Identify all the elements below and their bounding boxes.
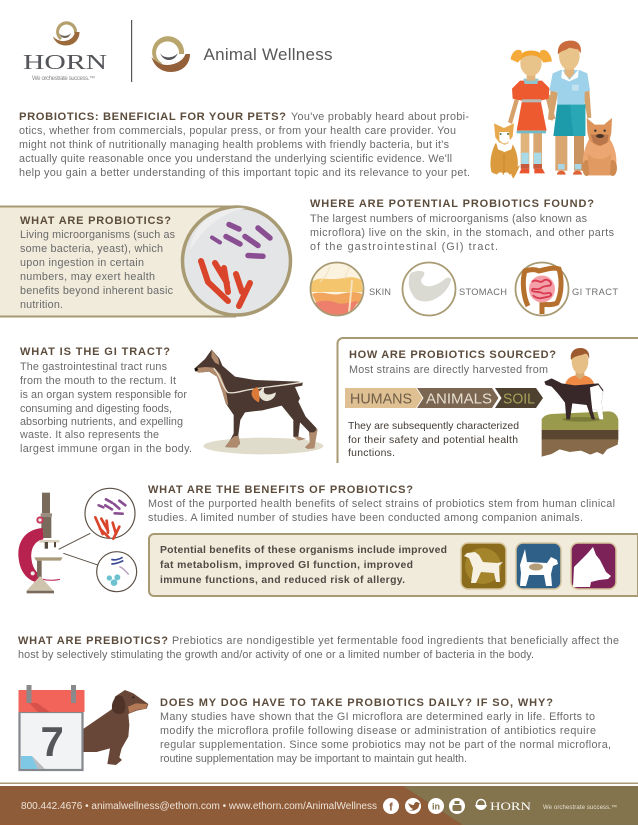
intro paragraph: otics, whether from commercials, popular press, or from your health care provider. You: [19, 125, 456, 137]
text block: daily probiotics: routine supplementation may be important to maintain gut health.: [160, 753, 467, 765]
panel: how are probiotics sourced: [338, 338, 638, 463]
text block: daily probiotics: Many studies have shown that the GI microflora are determined early in life. Efforts to: [160, 711, 595, 723]
footer logo: [475, 799, 531, 813]
text block: daily probiotics: [160, 697, 611, 765]
chevron: soil: [495, 388, 543, 408]
family with pets illustration: [490, 41, 617, 179]
panel: what is the gi tract: [19, 346, 192, 455]
icon: blue dog badge: [516, 543, 561, 589]
text block: daily probiotics: regular supplementation. Since some probiotics may not be part of the normal microflora,: [160, 739, 611, 751]
icon: magnified microbes: [97, 552, 137, 592]
tagline: We orchestrate success.™: [543, 804, 617, 811]
description: [20, 229, 176, 311]
chevron: animals: [417, 388, 498, 408]
heading: WHAT ARE THE BENEFITS OF PROBIOTICS?: [148, 484, 413, 496]
icon: magnified bacteria: [85, 488, 135, 539]
heading: HOW ARE PROBIOTICS SOURCED?: [349, 349, 556, 361]
intro paragraph: PROBIOTICS: BENEFICIAL FOR YOUR PETS?: [19, 111, 286, 123]
heading: WHAT IS THE GI TRACT?: [20, 346, 170, 358]
description: some bacteria, yeast), which: [20, 243, 163, 255]
icon: skin: [310, 262, 364, 316]
panel: benefits of probiotics: [148, 484, 638, 596]
callout: potential benefits: immune functions, and reduced risk of allergy.: [160, 575, 405, 586]
illustration: dachshund: [82, 690, 148, 765]
description: of the gastrointestinal (GI) tract.: [310, 241, 498, 253]
footer band: [0, 782, 638, 825]
heading: WHAT ARE PROBIOTICS?: [20, 215, 171, 227]
text block: what are prebiotics: Prebiotics are nondigestible yet fermentable food ingredients that beneficially affect the: [172, 635, 619, 647]
description: upon ingestion in certain: [20, 257, 144, 269]
icon: bacteria circle: [182, 207, 290, 315]
note: functions.: [348, 448, 395, 459]
icon: linkedin: in: [432, 802, 440, 812]
text block: what are prebiotics: host by selectively stimulating the growth and/or activity of one or a limited number of bacteria in the body.: [18, 649, 534, 661]
callout: potential benefits: [149, 534, 638, 596]
description: Living microorganisms (such as: [20, 229, 176, 241]
description: [310, 213, 615, 253]
Horn logo: HORN: [23, 50, 108, 74]
description: waste. It also represents the: [19, 429, 159, 441]
intro paragraph: You've probably heard about probi-: [291, 111, 469, 123]
chevron: animals: ANIMALS: [426, 392, 492, 408]
intro paragraph: [19, 111, 470, 179]
panel: where are probiotics found: [310, 198, 618, 316]
label: STOMACH: [459, 287, 507, 297]
Horn logo: We orchestrate success.™: [32, 75, 95, 82]
intro paragraph: actually quite reasonable once you understand the underlying scientific evidence. We'll: [19, 153, 452, 165]
icon: twitter: [405, 798, 421, 814]
icon: boy: [548, 41, 591, 175]
illustration: person, cow and soil: [542, 348, 618, 457]
label: GI TRACT: [572, 287, 618, 297]
description: is an organ system responsible for: [20, 389, 187, 401]
text block: daily probiotics: DOES MY DOG HAVE TO TAKE PROBIOTICS DAILY? IF SO, WHY?: [160, 697, 553, 709]
icon: youtube: [449, 798, 465, 814]
icon: cat: [490, 123, 520, 179]
label: SKIN: [369, 287, 391, 297]
chevron: humans: [345, 388, 422, 408]
illustration: microscope with magnified bacteria: [18, 488, 137, 593]
intro paragraph: might not think of nutritionally managing health problems with friendly bacteria, but it's: [19, 139, 450, 151]
icon: calendar showing seven: [18, 685, 84, 770]
icon: calendar showing seven: 7: [40, 718, 64, 765]
description: nutrition.: [20, 299, 63, 311]
icon: girl: [508, 50, 555, 173]
description: The gastrointestinal tract runs: [20, 361, 168, 373]
callout: potential benefits: fat metabolism, improved GI function, improved: [160, 560, 413, 571]
chevron: humans: HUMANS: [350, 392, 412, 408]
text block: what are prebiotics: WHAT ARE PREBIOTICS?: [18, 635, 168, 647]
illustration: doberman with digestive tract: [194, 350, 323, 454]
note: [348, 421, 519, 459]
icon: french bulldog: [582, 118, 617, 176]
description: The largest numbers of microorganisms (also known as: [310, 213, 588, 225]
description: Most of the purported health benefits of select strains of probiotics stem from human clinical: [148, 498, 615, 510]
description: numbers, may exert health: [20, 271, 155, 283]
text block: what are prebiotics: [18, 635, 619, 661]
description: largest immune organ in the body.: [20, 443, 192, 455]
note: They are subsequently characterized: [348, 421, 519, 432]
description: consuming and digesting foods,: [20, 403, 172, 415]
description: from the mouth to the rectum. It: [20, 375, 176, 387]
heading: WHERE ARE POTENTIAL PROBIOTICS FOUND?: [310, 198, 594, 210]
panel: what are probiotics: [0, 206, 290, 318]
description: absorbing nutrients, and expelling: [20, 416, 183, 428]
icon: facebook: f: [389, 802, 393, 814]
description: [19, 361, 192, 455]
description: studies. A limited number of studies have been conducted among companion animals.: [148, 512, 583, 524]
description: Most strains are directly harvested from: [349, 364, 548, 376]
icon: facebook: [383, 798, 399, 814]
icon: gi tract: [516, 262, 568, 316]
intro paragraph: help you gain a better understanding of this important topic and its relevance to your pet.: [19, 167, 470, 179]
Animal Wellness logo: [152, 36, 332, 72]
contact line: 800.442.4676 • animalwellness@ethorn.com • www.ethorn.com/AnimalWellness: [21, 801, 377, 812]
divider: [131, 20, 132, 82]
description: [148, 498, 615, 524]
footer logo: HORN: [490, 799, 531, 813]
chevron: soil: SOIL: [503, 392, 535, 408]
description: benefits beyond inherent basic: [20, 285, 174, 297]
description: microflora) live on the skin, in the stomach, and other parts: [310, 227, 615, 239]
icon: gold dog badge: [461, 543, 506, 589]
text block: daily probiotics: modify the microflora profile following disease or administration of antibiotics require: [160, 725, 596, 737]
icon: linkedin: [428, 798, 444, 814]
Animal Wellness logo: Animal Wellness: [204, 45, 332, 64]
note: for their safety and potential health: [348, 435, 518, 446]
icon: purple dog badge: [571, 543, 616, 589]
icon: stomach: [402, 262, 456, 316]
Horn logo: [23, 21, 108, 82]
callout: potential benefits: Potential benefits of these organisms include improved: [160, 545, 447, 556]
